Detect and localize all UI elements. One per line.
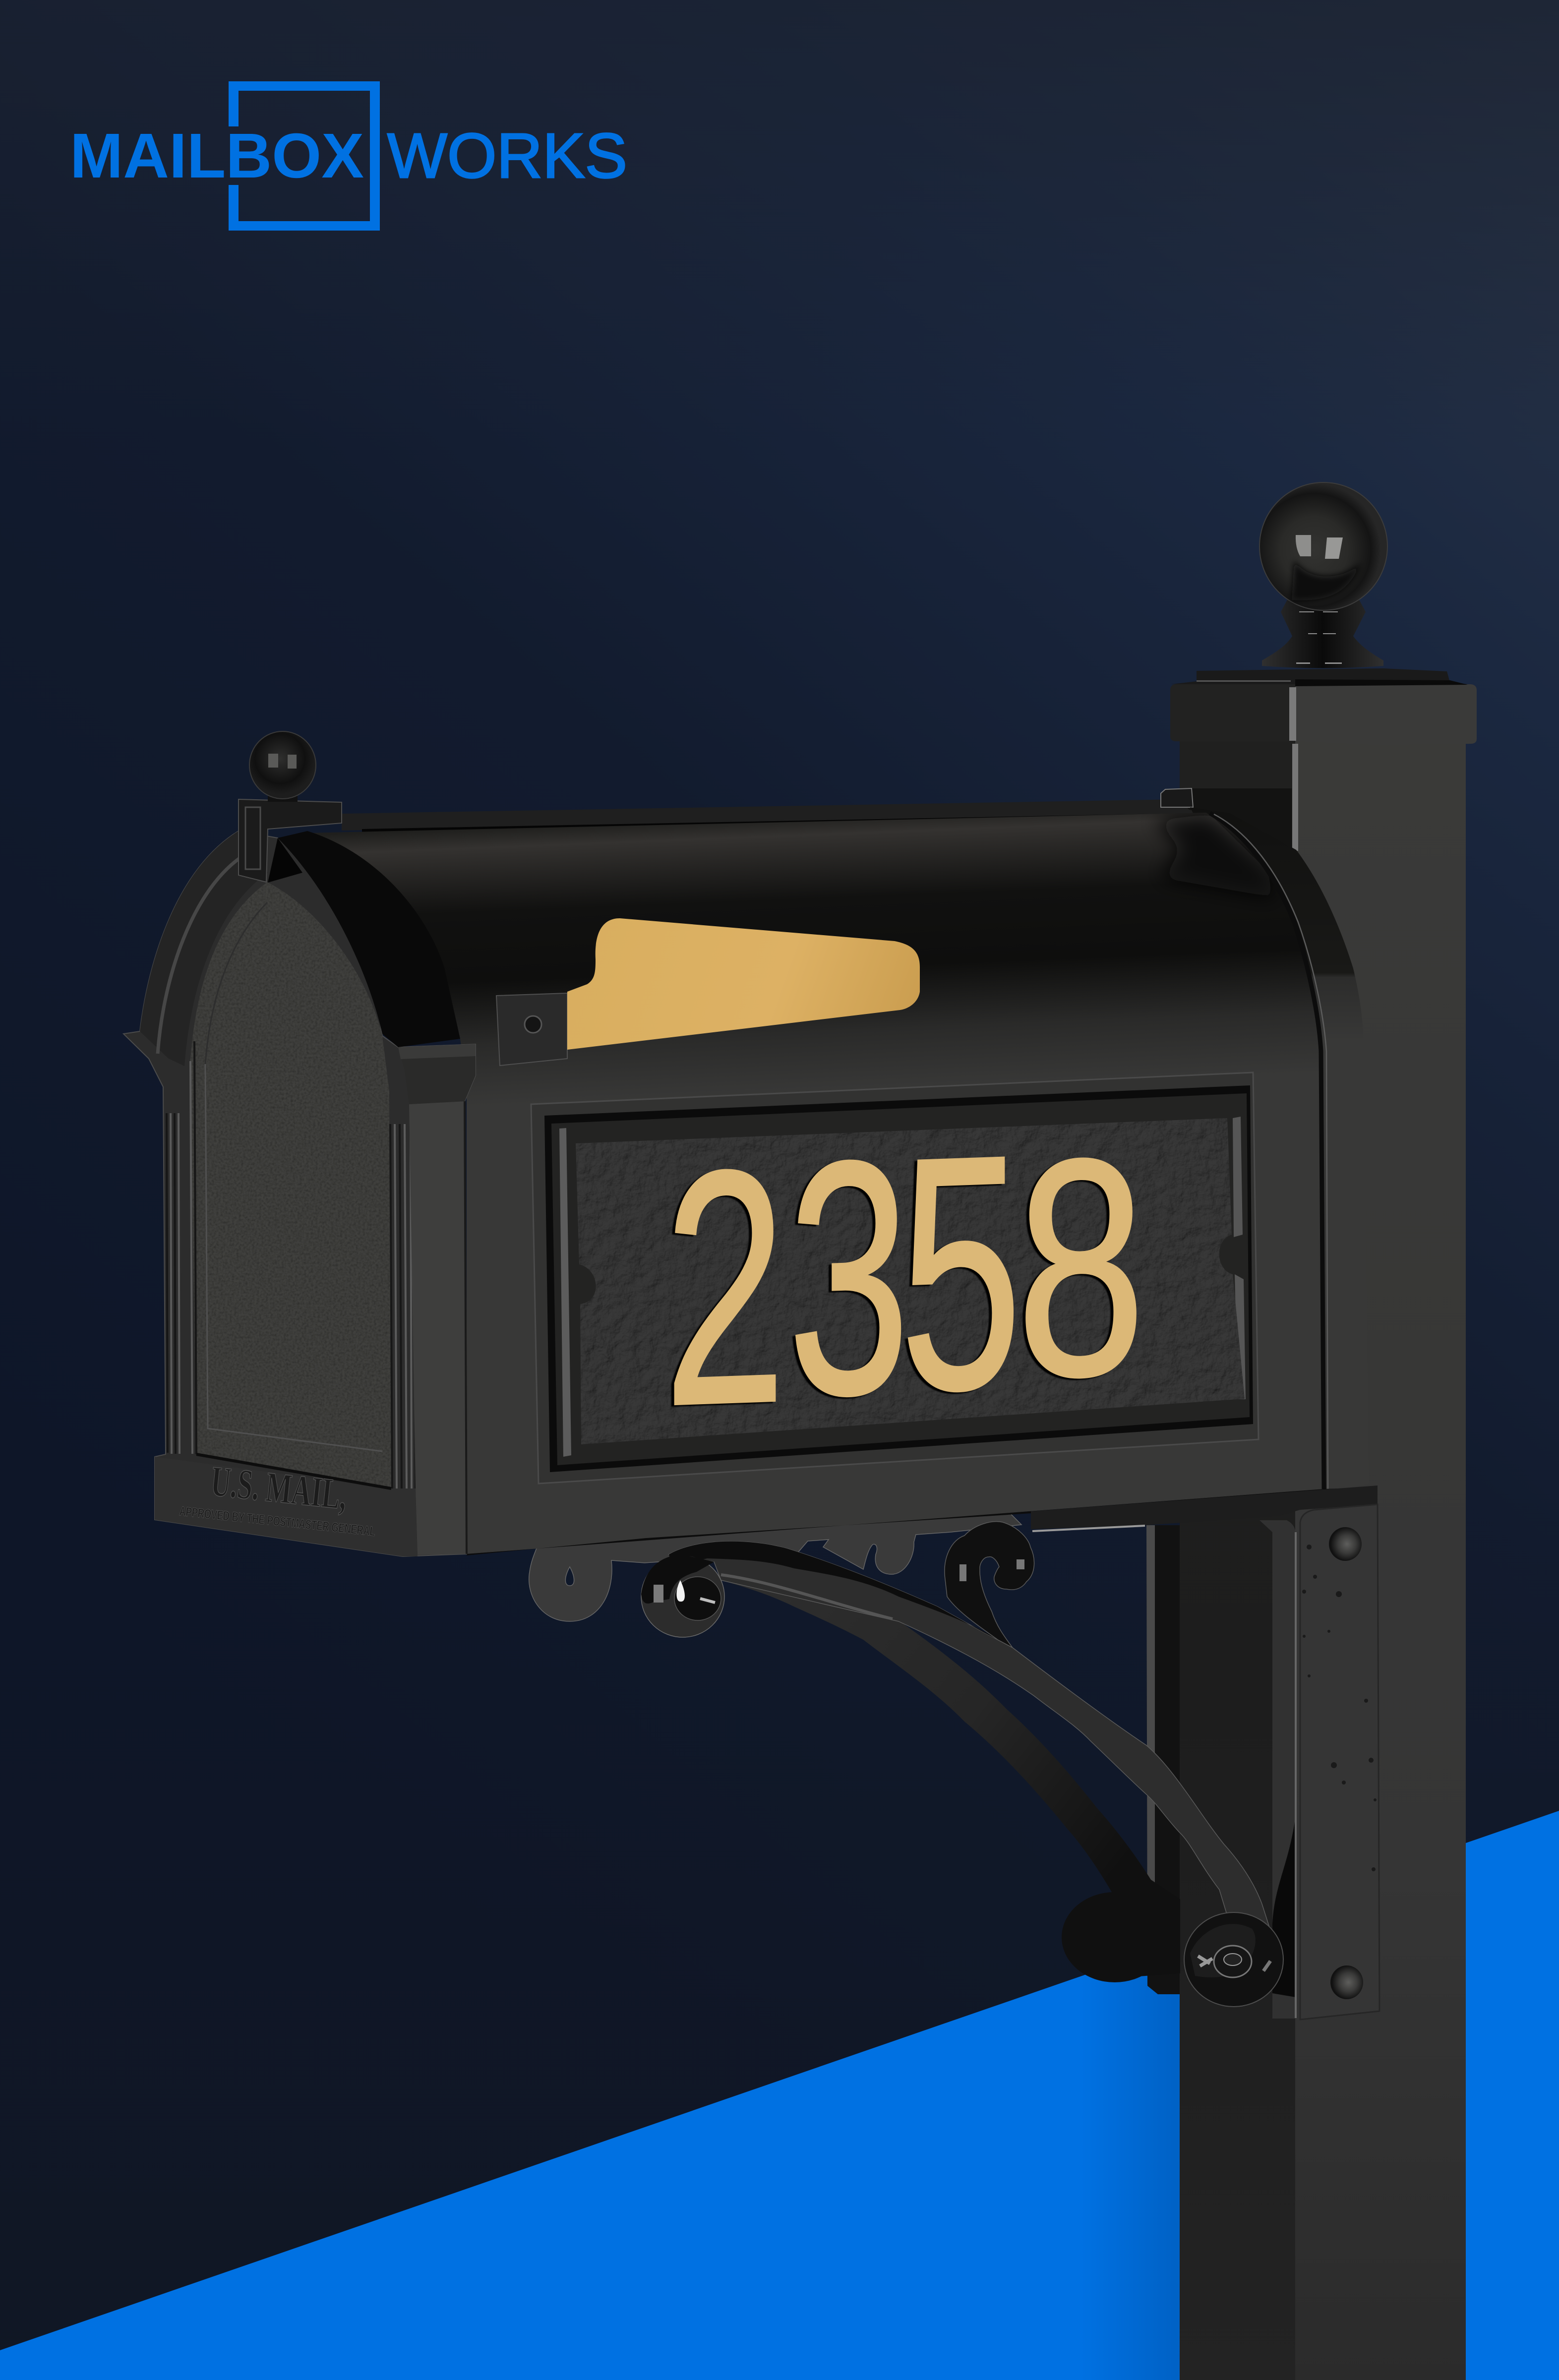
flag mounting plate (496, 993, 567, 1066)
house number 2358: 3 (788, 1090, 910, 1466)
left scroll (641, 1554, 724, 1637)
corner column face (409, 1101, 467, 1555)
dome corner shadow (1155, 813, 1269, 884)
blue diagonal band (0, 1811, 1559, 2380)
right reeded column (390, 1111, 416, 1490)
logo frame (229, 81, 380, 231)
flag screw (525, 1016, 541, 1033)
corner ledge (398, 1044, 476, 1104)
upper arm dark top band (669, 1542, 1013, 1648)
bottom scroll (1184, 1912, 1283, 2007)
post with cap and finial (1146, 482, 1477, 2380)
mounting plate, ear and hook (529, 1510, 1021, 1621)
embossed approval line: APPROVED BY THE POSTMASTER GENERAL (179, 1503, 376, 1539)
end panel arch moulding (140, 831, 268, 1066)
raised gold flag (567, 918, 920, 1050)
hinge block (239, 799, 342, 882)
end panel silhouette (123, 831, 476, 1556)
bottom disc (1062, 1892, 1168, 1982)
finial ball (1259, 482, 1387, 610)
left reeded column (167, 1041, 196, 1454)
plate top rail (1031, 1486, 1378, 1529)
lower arm (721, 1572, 1180, 1978)
rail light edge (1032, 1526, 1145, 1531)
spine tab (1161, 788, 1193, 807)
top spine strip (342, 799, 1193, 831)
plate lower bolt (1330, 1965, 1363, 1999)
plaque plate (551, 1093, 1250, 1465)
mailbox (123, 731, 1371, 1556)
plate speckle (1302, 1545, 1377, 1871)
end panel inset line (205, 1064, 382, 1451)
upper arm (669, 1542, 1274, 1943)
top scroll highlights (959, 1559, 1024, 1581)
house number 2358: 8 (1017, 1093, 1145, 1442)
logo: Mailbox Works (70, 81, 627, 231)
plate front (1300, 1504, 1379, 2020)
bracket backing strip (1146, 1525, 1180, 1994)
logo wordmark MAILBOX: MAILBOX (70, 120, 364, 191)
top knob (249, 731, 316, 802)
post left face (1180, 739, 1295, 2380)
shadow behind mailbox (1180, 788, 1292, 850)
body lower edge (467, 1488, 1371, 1555)
logo wordmark WORKS: WORKS (387, 120, 627, 191)
post mounting plate (1031, 1486, 1379, 2020)
house number 2358 (664, 1085, 1145, 1475)
embossed U.S. MAIL lettering: U.S. MAIL, (209, 1457, 350, 1519)
plaque textured field (576, 1118, 1245, 1444)
post right face (1295, 739, 1466, 2380)
end panel textured face (190, 882, 391, 1488)
house number 2358: 2 (664, 1100, 786, 1475)
dome side shading (268, 838, 302, 883)
top scroll (945, 1522, 1034, 1648)
plaque recess (544, 1085, 1253, 1472)
house number 2358: 5 (900, 1085, 1022, 1461)
plate flange (1259, 1520, 1296, 2019)
trim groove (1210, 813, 1324, 1489)
post corner highlight (1292, 744, 1298, 851)
scroll support bracket (529, 1510, 1283, 2007)
post cap (1170, 684, 1295, 741)
finial neck (1262, 598, 1383, 668)
right outer trim (1190, 807, 1369, 1497)
upper arm ridge (721, 1575, 893, 1619)
house number plaque frame (531, 1072, 1259, 1484)
plate upper bolt (1329, 1527, 1362, 1561)
base plinth (155, 1457, 418, 1556)
long side body with domed top (307, 813, 1324, 1554)
black dome end band (278, 831, 460, 1047)
